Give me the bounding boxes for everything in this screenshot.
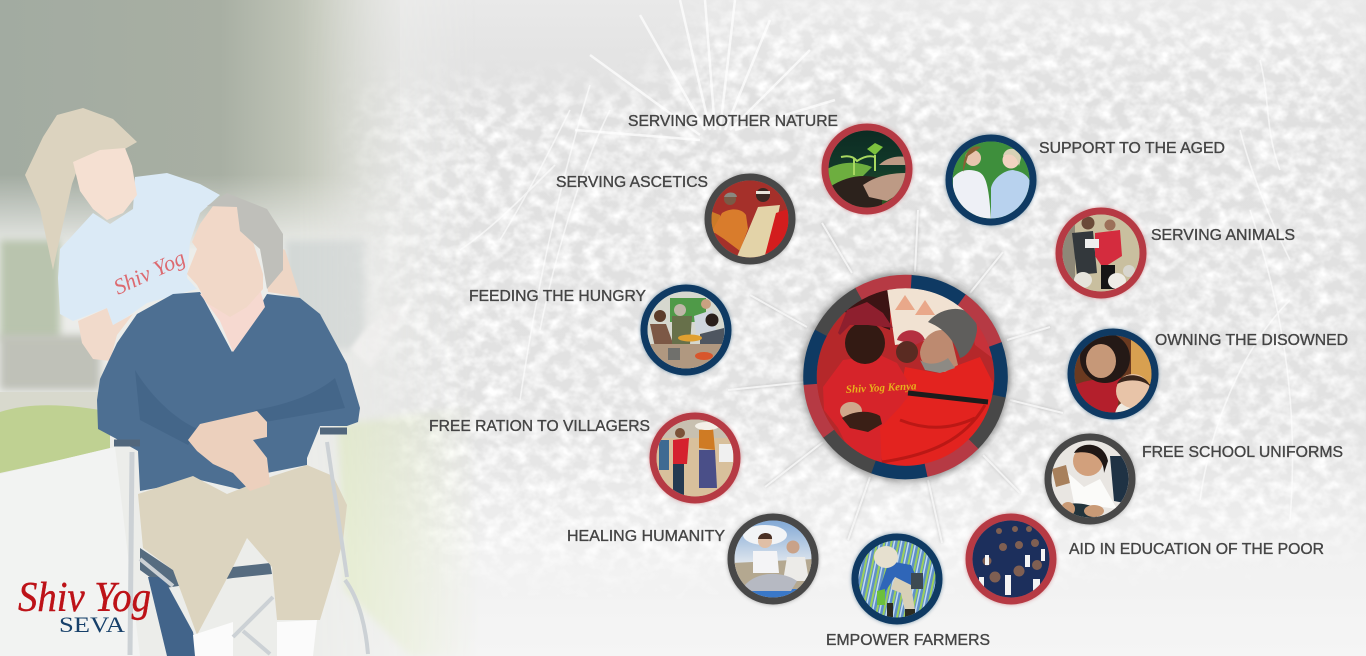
woman: shirt: [58, 173, 220, 325]
woman: shirt logo: Shiv Yog: [110, 245, 189, 300]
left photo: caregiver and man in wheelchair: [0, 0, 480, 656]
label: support to the aged: SUPPORT TO THE AGED: [1039, 140, 1225, 157]
woman: hair: [25, 108, 137, 270]
label: empower farmers: EMPOWER FARMERS: [826, 632, 990, 649]
woman: face: [73, 148, 137, 220]
central circle: [796, 268, 1014, 486]
background: palm fan plant: [575, 0, 835, 140]
man: socks: [193, 620, 317, 656]
label: owning the disowned: OWNING THE DISOWNED: [1155, 332, 1348, 349]
central glow: [802, 273, 1010, 481]
child cap: [838, 302, 893, 335]
man robe: [875, 357, 995, 468]
label: serving animals: SERVING ANIMALS: [1151, 227, 1295, 244]
background child: [897, 330, 925, 345]
man: face: [187, 206, 263, 317]
label: healing humanity: HEALING HUMANITY: [567, 528, 725, 545]
man hair: [928, 309, 977, 358]
man: seat: [140, 548, 272, 588]
woman: far arm: [262, 240, 300, 297]
connector lines: [728, 210, 1063, 543]
background: foliage texture: [368, 0, 1366, 563]
logo subtitle: SEVA: [59, 612, 125, 637]
item: support to the aged: [946, 135, 1036, 225]
item: empower farmers: [852, 534, 942, 624]
item: feeding the hungry: [641, 285, 731, 375]
label: free school uniforms: FREE SCHOOL UNIFORMS: [1142, 444, 1343, 461]
item: aid in education of the poor: [966, 514, 1056, 604]
man: trousers: [138, 465, 347, 635]
man face: [920, 330, 958, 372]
woman: arm: [78, 308, 133, 361]
wheelchair: [114, 431, 368, 655]
central photo: Shiv Yog Kenya: [846, 380, 917, 396]
man: hands: [188, 411, 270, 491]
man: hair: [207, 193, 283, 289]
black stick: [908, 393, 988, 402]
man: sweater: [97, 292, 360, 494]
backdrop pattern: [887, 288, 965, 345]
item: serving ascetics: [705, 174, 795, 264]
armrests: [114, 431, 347, 443]
man: sweater folds: [135, 370, 345, 445]
central ring segments: [770, 242, 1041, 512]
item: owning the disowned: [1068, 329, 1158, 419]
item: free school uniforms: [1045, 434, 1135, 524]
item: healing humanity: [728, 514, 818, 604]
hedge: [0, 405, 110, 473]
man: collar: [200, 289, 265, 352]
path: [43, 448, 110, 464]
child ball: [840, 402, 862, 418]
item: serving mother nature: [822, 124, 912, 214]
item: serving animals: [1056, 208, 1146, 298]
item: free ration to villagers: [650, 413, 740, 503]
child hand: [842, 412, 882, 432]
label: serving mother nature: SERVING MOTHER NATURE: [628, 113, 838, 130]
label: serving ascetics: SERVING ASCETICS: [556, 174, 708, 191]
man: lower leg: [148, 577, 197, 656]
logo: shiv yog seva: [18, 575, 151, 637]
child face: [845, 322, 885, 364]
central photo: [816, 288, 994, 466]
man beard: [920, 358, 955, 373]
child shirt: [823, 355, 913, 470]
label: free ration to villagers: FREE RATION TO VILLAGERS: [429, 418, 650, 435]
photo backdrop: [0, 0, 480, 656]
logo wordmark: Shiv Yog: [18, 575, 151, 621]
background: white grass blades: [460, 60, 1293, 520]
label: feeding the hungry: FEEDING THE HUNGRY: [469, 288, 646, 305]
label: aid in education of the poor: AID IN EDUCATION OF THE POOR: [1069, 541, 1324, 558]
